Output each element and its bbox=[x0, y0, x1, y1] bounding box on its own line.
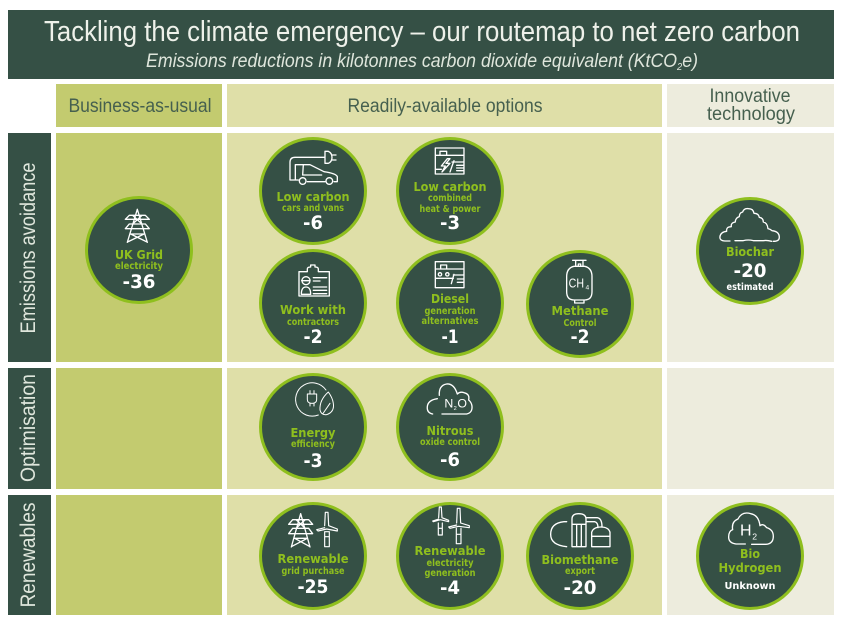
badge: renewable electricity generation: -4 bbox=[440, 577, 460, 599]
badge: biochar: estimated bbox=[726, 282, 774, 293]
badge: renewable grid purchase: Renewable bbox=[278, 552, 348, 566]
badge: work with contractors: contractors bbox=[287, 317, 339, 328]
row label: renewables: Renewables bbox=[17, 502, 40, 608]
badge: biochar: -20 bbox=[734, 260, 766, 282]
badge: energy efficiency: efficiency bbox=[291, 439, 336, 450]
icon: N2O cloud: 2 bbox=[454, 406, 457, 412]
badge: UK Grid electricity: -36 bbox=[122, 271, 156, 293]
badge: renewable electricity generation: electricity bbox=[426, 558, 474, 569]
badge: renewable grid purchase bbox=[260, 504, 366, 608]
badge: work with contractors bbox=[260, 250, 366, 356]
panel: business-as-usual optimisation bbox=[56, 368, 222, 489]
badge: bio hydrogen: Hydrogen bbox=[718, 561, 782, 575]
badge: renewable electricity generation: generation bbox=[424, 568, 476, 579]
badge: energy efficiency bbox=[260, 374, 366, 480]
panel: innovative optimisation bbox=[667, 368, 834, 489]
badge: renewable grid purchase: grid purchase bbox=[282, 566, 344, 577]
badge: nitrous oxide control: oxide control bbox=[420, 437, 480, 448]
row label: optimisation bbox=[8, 368, 51, 489]
column header: innovative technology: technology bbox=[707, 104, 795, 125]
badge: diesel generation alternatives: Diesel bbox=[431, 292, 469, 306]
icon: ID badge bbox=[299, 265, 329, 296]
badge: methane control: Methane bbox=[552, 304, 608, 318]
badge: low carbon cars and vans: Low carbon bbox=[276, 190, 350, 204]
badge: UK Grid electricity: electricity bbox=[115, 261, 164, 272]
column header: innovative technology: Innovative bbox=[710, 86, 790, 107]
subtitle: e) bbox=[682, 51, 698, 72]
badge: biochar: Biochar bbox=[726, 245, 774, 259]
badge: renewable electricity generation bbox=[398, 504, 502, 608]
badge: low carbon combined heat and power: combined bbox=[428, 193, 472, 204]
badge: energy efficiency: Energy bbox=[290, 426, 336, 440]
panel: innovative emissions avoidance bbox=[667, 133, 834, 362]
panel: business-as-usual renewables bbox=[56, 495, 222, 615]
icon: two wind turbines bbox=[433, 507, 469, 544]
icon: gas cylinder: CH bbox=[569, 275, 584, 290]
icon: gas cylinder: 4 bbox=[585, 284, 589, 291]
badge: energy efficiency: -3 bbox=[304, 450, 322, 472]
badge: renewable grid purchase: -25 bbox=[298, 576, 328, 598]
icon: plug and leaf bbox=[296, 383, 334, 416]
icon: CHP unit bbox=[435, 148, 464, 174]
icon: H2 cloud: 2 bbox=[752, 532, 757, 542]
badge: UK Grid electricity: UK Grid bbox=[115, 248, 163, 262]
icon: pylon bbox=[125, 209, 149, 242]
panel: innovative renewables bbox=[667, 495, 834, 615]
badge: diesel generation alternatives bbox=[398, 250, 502, 356]
icon: generator bbox=[435, 262, 464, 288]
badge: biochar bbox=[698, 198, 802, 304]
icon: H2 cloud bbox=[729, 513, 773, 544]
icon: electric van bbox=[290, 151, 337, 184]
panel: readily-available optimisation bbox=[227, 368, 662, 489]
badge: bio hydrogen: Bio bbox=[740, 547, 760, 561]
badge: diesel generation alternatives: generation bbox=[424, 306, 476, 317]
badge: nitrous oxide control bbox=[398, 374, 502, 480]
badge: bio hydrogen bbox=[698, 504, 802, 608]
icon: pylon and wind turbine bbox=[289, 512, 337, 547]
row label: renewables bbox=[8, 495, 51, 615]
badge: low carbon cars and vans: -6 bbox=[303, 212, 323, 234]
badge: methane control bbox=[528, 252, 632, 356]
icon: N2O cloud: O bbox=[457, 396, 467, 410]
badge: biomethane export: export bbox=[565, 566, 595, 577]
badge: biomethane export bbox=[528, 504, 632, 608]
panel: readily-available renewables bbox=[227, 495, 662, 615]
badge: diesel generation alternatives: alternatives bbox=[422, 316, 479, 327]
badge: methane control: Control bbox=[564, 318, 596, 329]
subtitle: 2 bbox=[676, 62, 683, 73]
badge: biomethane export: Biomethane bbox=[542, 553, 618, 567]
icon: H2 cloud: H bbox=[740, 523, 752, 540]
badge: renewable electricity generation: Renewable bbox=[414, 544, 486, 558]
row label: emissions avoidance: Emissions avoidance bbox=[17, 162, 40, 334]
column header: business-as-usual bbox=[56, 84, 222, 127]
icon: gas cylinder bbox=[567, 260, 592, 303]
subtitle: Emissions reductions in kilotonnes carbon dioxide equivalent (KtCO bbox=[146, 51, 715, 72]
column header: readily-available options bbox=[227, 84, 662, 127]
badge: biomethane export: -20 bbox=[564, 577, 596, 599]
badge: nitrous oxide control: Nitrous bbox=[426, 424, 474, 438]
badge: low carbon combined heat and power bbox=[398, 138, 502, 244]
row label: emissions avoidance bbox=[8, 133, 51, 362]
badge: low carbon combined heat and power: heat & power bbox=[420, 204, 481, 215]
icon: biomethane plant bbox=[551, 514, 610, 547]
badge: methane control: -2 bbox=[570, 326, 590, 348]
badge: low carbon combined heat and power: -3 bbox=[440, 212, 460, 234]
badge: nitrous oxide control: -6 bbox=[440, 449, 460, 471]
header banner bbox=[8, 10, 834, 79]
column header: innovative technology bbox=[667, 84, 834, 127]
panel: readily-available emissions avoidance bbox=[227, 133, 662, 362]
badge: low carbon cars and vans: cars and vans bbox=[282, 203, 344, 214]
badge: bio hydrogen: Unknown bbox=[724, 581, 776, 592]
badge: diesel generation alternatives: -1 bbox=[442, 326, 458, 348]
badge: UK Grid electricity bbox=[86, 198, 192, 302]
badge: work with contractors: Work with bbox=[280, 303, 346, 317]
row label: optimisation: Optimisation bbox=[17, 374, 40, 482]
panel: business-as-usual emissions avoidance bbox=[56, 133, 222, 362]
icon: N2O cloud bbox=[427, 384, 472, 414]
badge: work with contractors: -2 bbox=[304, 326, 322, 348]
badge: low carbon cars and vans bbox=[260, 138, 366, 244]
badge: low carbon combined heat and power: Low carbon bbox=[414, 180, 486, 194]
column header: business-as-usual: Business-as-usual bbox=[68, 96, 212, 117]
icon: biochar heap bbox=[720, 209, 779, 241]
column header: readily-available options: Readily-available options bbox=[348, 96, 542, 117]
icon: N2O cloud: N bbox=[444, 396, 453, 410]
